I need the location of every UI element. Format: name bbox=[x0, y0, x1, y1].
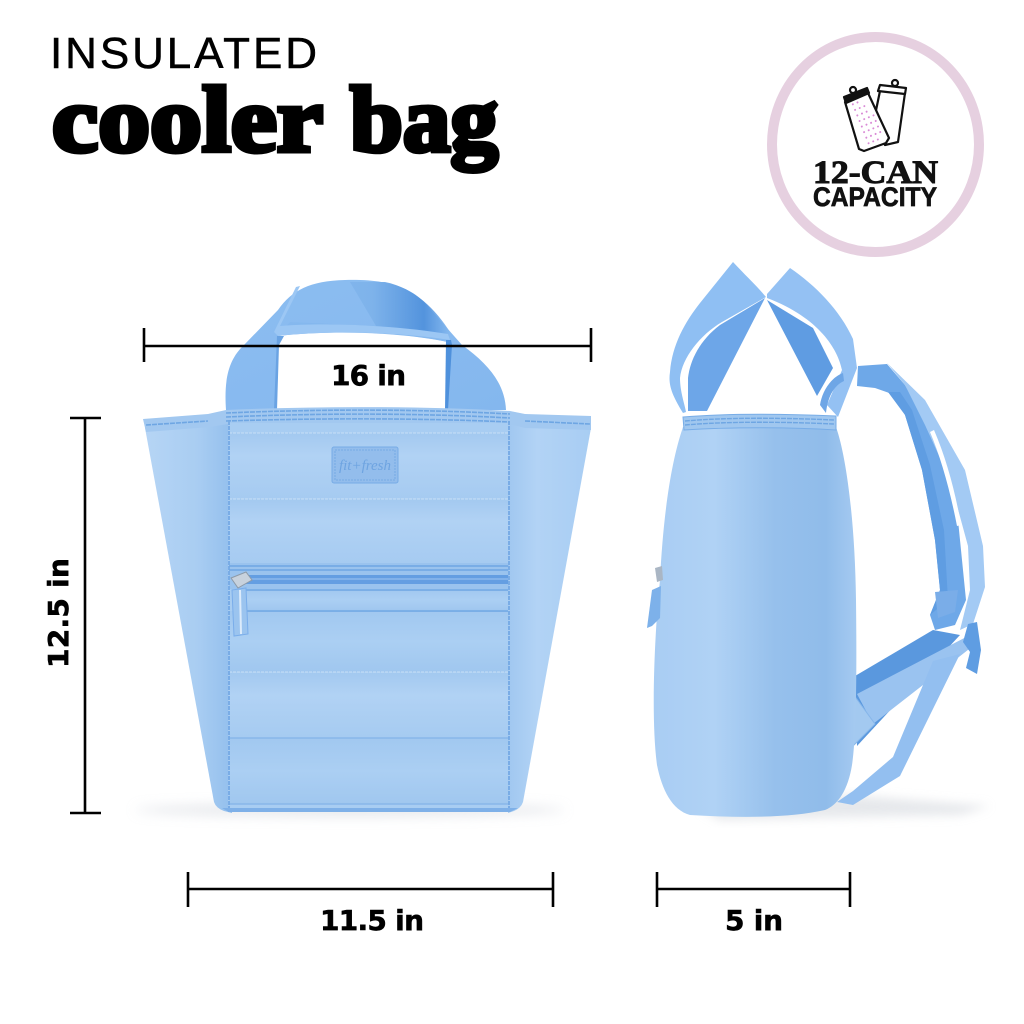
dimension: 5 in bbox=[657, 872, 850, 937]
dimension: 16 in bbox=[144, 328, 591, 392]
zipper bbox=[246, 575, 508, 584]
left handle bbox=[670, 262, 766, 413]
dimension: 16 in: 16 in bbox=[331, 359, 406, 392]
badge: 12-can capacity bbox=[772, 37, 979, 252]
dimension: 12.5 in: 12.5 in bbox=[42, 558, 75, 668]
icon: two cans bbox=[844, 80, 906, 151]
dimension: 11.5 in: 11.5 in bbox=[320, 904, 424, 937]
lower straps bbox=[837, 622, 981, 805]
shoulder strap bbox=[857, 363, 985, 630]
title: INSULATED: INSULATED bbox=[50, 29, 317, 78]
logo patch: fit+fresh bbox=[339, 458, 391, 474]
logo patch bbox=[332, 447, 398, 483]
left gusset bbox=[145, 420, 232, 813]
title: cooler bag bbox=[52, 69, 498, 172]
dimension: 11.5 in bbox=[188, 872, 553, 937]
title: cooler bag: bag bbox=[350, 69, 498, 172]
side body bbox=[654, 427, 856, 817]
ground shadow bbox=[700, 795, 990, 820]
front view: cooler bag bbox=[135, 280, 591, 816]
front panel quilting bbox=[222, 421, 518, 812]
top rim bbox=[143, 407, 591, 432]
ground shadow bbox=[135, 804, 565, 816]
buckle bbox=[963, 622, 981, 674]
zipper pull bbox=[231, 572, 252, 636]
badge text: CAPACITY: CAPACITY bbox=[813, 182, 937, 212]
badge text: 12-CAN: 12-CAN bbox=[813, 155, 938, 191]
tote handle bbox=[226, 280, 506, 410]
top rim bbox=[683, 414, 836, 430]
right gusset bbox=[508, 420, 591, 813]
side view: cooler bag bbox=[647, 262, 990, 820]
dimension: 5 in: 5 in bbox=[725, 904, 783, 937]
title: cooler bag: cooler bbox=[52, 69, 323, 172]
dimension: 12.5 in bbox=[42, 418, 101, 813]
side zipper pull bbox=[647, 566, 663, 628]
right handle bbox=[767, 268, 857, 417]
